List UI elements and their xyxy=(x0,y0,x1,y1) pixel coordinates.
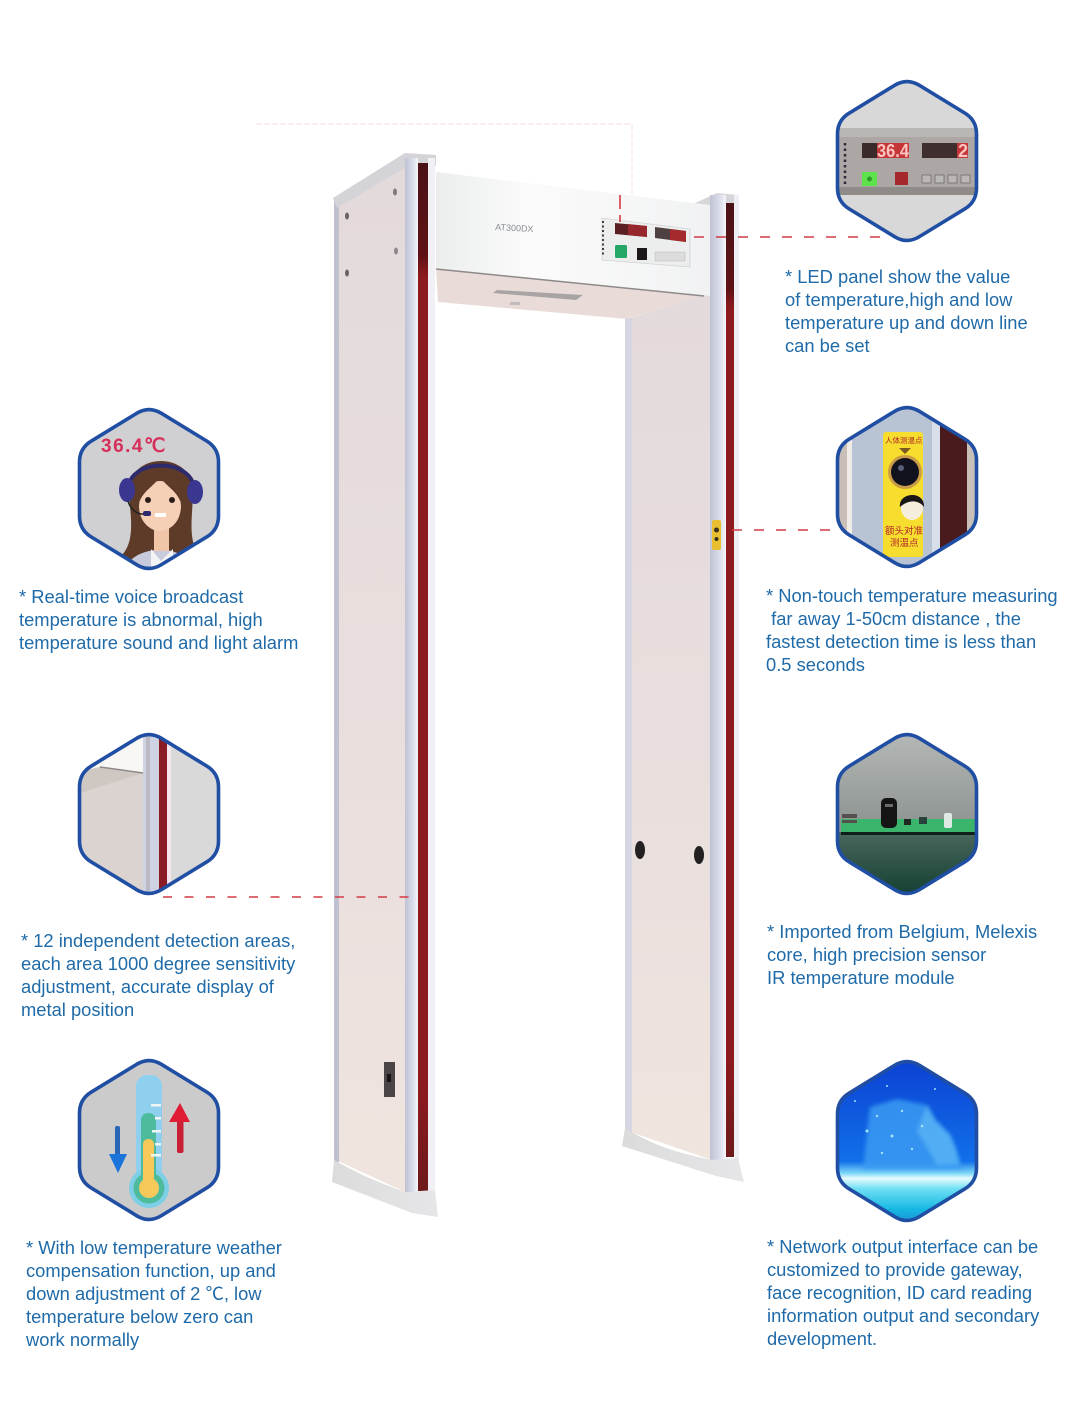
text: LED panel feature: * LED panel show the value of temperature,high and low temperature up and down line can be set xyxy=(785,266,1028,356)
walk-through gate xyxy=(332,153,744,1217)
text: network output feature: * Network output interface can be customized to provide gateway, face recognition, ID card reading information output and secondary development. xyxy=(767,1236,1039,1349)
crossbeam xyxy=(436,172,710,319)
text: non-touch feature: * Non-touch temperature measuring far away 1-50cm distance , the fastest detection time is less than 0.5 seconds xyxy=(766,585,1058,675)
icon: voice broadcast hexagon xyxy=(74,404,224,574)
crossbeam: AT300DX xyxy=(495,222,534,234)
icon: voice broadcast hexagon: 36.4℃ xyxy=(101,436,167,457)
control panel xyxy=(602,218,690,267)
text: sensor core feature: * Imported from Belgium, Melexis core, high precision sensor IR temperature module xyxy=(767,921,1037,988)
icon: LED panel hexagon: 36.4 xyxy=(877,141,909,161)
icon: LED panel hexagon xyxy=(832,76,982,246)
icon: network AI hexagon xyxy=(832,1056,982,1226)
icon: sensor hexagon: 测温点 xyxy=(890,538,919,549)
icon: sensor hexagon: 人体测温点 xyxy=(885,435,923,445)
dashed leader lines xyxy=(163,195,881,897)
icon: sensor hexagon xyxy=(832,402,982,572)
right pillar xyxy=(622,193,744,1182)
text: weather compensation feature: * With low temperature weather compensation function, up and down adjustment of 2 ℃, low temperature below zero can work normally xyxy=(26,1237,282,1350)
main illustration xyxy=(78,80,978,1222)
text: voice broadcast feature: * Real-time voice broadcast temperature is abnormal, high temperature sound and light alarm xyxy=(19,586,298,653)
icon: thermometer hexagon xyxy=(74,1055,224,1225)
left pillar xyxy=(332,153,438,1217)
text: detection areas feature: * 12 independent detection areas, each area 1000 degree sensitivity adjustment, accurate display of metal position xyxy=(21,930,295,1020)
icon: IR sensor module hexagon xyxy=(832,729,982,900)
icon: LED panel hexagon: 2 xyxy=(958,141,968,161)
faint guide lines xyxy=(256,124,632,196)
icon: detection zones hexagon xyxy=(74,729,226,899)
icon: sensor hexagon: 额头对准 xyxy=(885,525,924,537)
